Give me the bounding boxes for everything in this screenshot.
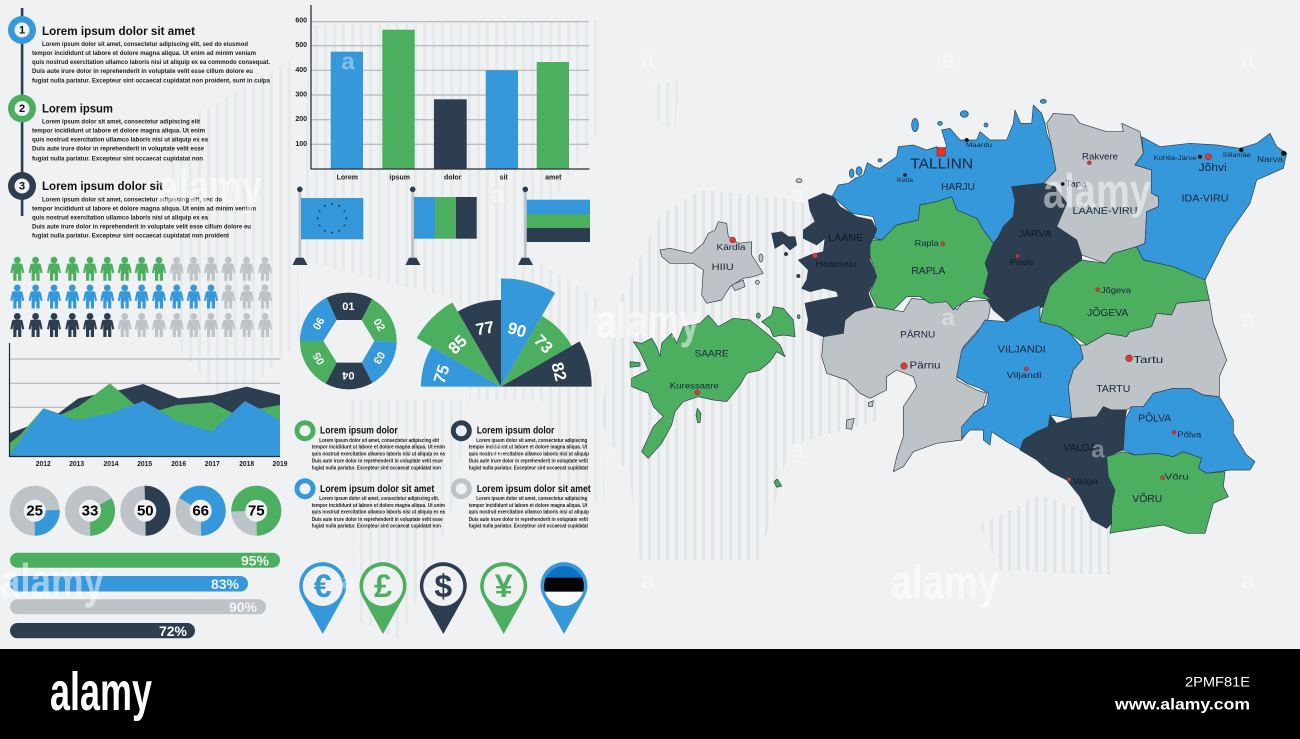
hexagon ring chart xyxy=(300,293,397,389)
area chart: 2017 xyxy=(205,461,220,468)
background striped world map xyxy=(170,20,1110,640)
progress bars: 90% xyxy=(229,599,258,615)
bar chart: Lorem xyxy=(337,174,358,182)
map pin: dollar: $ xyxy=(434,568,452,604)
map labels: Sillamäe xyxy=(1223,152,1251,159)
text block: blue: quis nostrud exercitation ullamco laboris nisi ut aliquip ex ea xyxy=(312,510,445,516)
map pin: yen xyxy=(480,562,527,634)
step 3: 3 xyxy=(19,180,25,192)
progress bars: 83% xyxy=(211,576,240,592)
text block: dark: Lorem ipsum dolor xyxy=(477,425,554,437)
map labels: Tapa xyxy=(1066,180,1087,188)
region: Viljandi xyxy=(957,305,1083,450)
text block: dark: fugiat nulla pariatur. Excepteur sint occaecat cupidatat xyxy=(469,465,588,471)
text block: gray: Duis aute irure dolor in reprehenderit in voluptate velit xyxy=(469,517,588,523)
watermarks: alamy xyxy=(891,556,999,610)
step 3 xyxy=(8,172,256,240)
text block: gray xyxy=(453,481,591,529)
watermarks: a xyxy=(941,46,955,74)
donut charts: 25 xyxy=(26,502,43,520)
watermarks: a xyxy=(1241,568,1255,594)
area chart: 2012 xyxy=(36,461,51,468)
watermarks xyxy=(0,46,1255,610)
map labels: Narva xyxy=(1257,154,1283,164)
map labels: Maardu xyxy=(966,142,992,149)
bar chart: dolor xyxy=(444,174,462,182)
flag: horizontal tricolour xyxy=(518,186,590,265)
map labels: VALGA xyxy=(1064,443,1097,454)
people pictogram xyxy=(10,257,272,337)
bar chart xyxy=(295,5,590,182)
text block: green: Duis aute irure dolor in reprehenderit in voluptate velit esse xyxy=(312,459,443,465)
map labels: Valga xyxy=(1073,477,1098,486)
map labels: Pärnu xyxy=(910,360,940,372)
watermarks: a xyxy=(791,436,805,464)
text block: gray: tempor incididunt ut labore et dolore magna aliqua. Ut xyxy=(469,503,588,509)
watermarks: a xyxy=(941,304,955,332)
region: Põlva xyxy=(1123,388,1255,473)
map city markers xyxy=(695,138,1286,481)
map pin: dollar xyxy=(420,562,467,634)
map labels: Põlva xyxy=(1177,430,1202,440)
bar chart: amet xyxy=(545,174,562,182)
map labels: Kärdla xyxy=(716,243,746,252)
map pin: Estonia flag xyxy=(540,562,588,634)
map pin: pound xyxy=(360,562,406,634)
text block: blue: Lorem ipsum dolor sit amet xyxy=(320,483,435,495)
watermarks: a xyxy=(641,46,655,74)
map pin: pound: £ xyxy=(374,568,392,604)
text block: blue: Lorem ipsum dolor sit amet, consectetur adipiscing elit, xyxy=(319,496,440,502)
region: Võru xyxy=(1107,452,1228,533)
region: Hiiu xyxy=(660,222,763,303)
region: Lääne-Viru xyxy=(1043,113,1158,263)
footer logo: alamy xyxy=(50,662,152,722)
watermarks: alamy xyxy=(0,556,104,608)
map labels: TARTU xyxy=(1096,384,1130,395)
text block: gray: quis nostrud exercitation ullamco laboris nisi ut aliquip xyxy=(469,510,589,516)
step 1: fugiat nulla pariatur. Excepteur sint occaecat cupidatat non proident, sunt in culpa xyxy=(32,78,270,84)
area chart: 2014 xyxy=(104,461,119,468)
map labels: LÄÄNE-VIRU xyxy=(1072,205,1138,217)
watermarks: a xyxy=(1241,46,1255,74)
fan chart: 85 xyxy=(444,331,471,358)
progress bars: 95% xyxy=(241,552,270,568)
watermarks: a xyxy=(1241,306,1255,334)
hexagon ring chart: 06 xyxy=(311,316,328,332)
map labels: Tartu xyxy=(1133,354,1164,366)
donut charts: 50 xyxy=(137,502,154,520)
donut charts xyxy=(17,486,274,536)
text block: dark: tempor incididunt ut labore et dolore magna aliqua. Ut xyxy=(469,445,588,451)
map labels: Rakvere xyxy=(1082,152,1118,162)
watermarks: a xyxy=(1091,436,1105,464)
bar chart: ipsum xyxy=(389,174,410,182)
step 1 xyxy=(8,16,270,84)
region: Valga xyxy=(1020,407,1127,528)
map labels: RAPLA xyxy=(911,266,946,277)
map labels: JÕGEVA xyxy=(1087,306,1129,319)
text block: blue: tempor incididunt ut labore et dolore magna aliqua. Ut enim xyxy=(312,503,446,509)
map labels: HARJU xyxy=(941,182,975,193)
watermarks: a xyxy=(341,48,355,76)
map labels: Kohtla-Järve xyxy=(1154,155,1197,162)
step 2: Lorem ipsum dolor sit amet, consectetur adipiscing elit xyxy=(42,118,201,126)
map labels: Haapsalu xyxy=(816,260,856,268)
fan chart: 77 xyxy=(474,317,496,339)
region: Pärnu xyxy=(822,295,992,472)
bar chart: 600 xyxy=(295,18,307,25)
map of Estonia xyxy=(630,99,1287,533)
text block: dark: Duis aute irure dolor in reprehenderit in voluptate velit xyxy=(469,459,588,465)
watermarks: a xyxy=(341,568,355,594)
text block: gray: Lorem ipsum dolor sit amet, consectetur adipiscing xyxy=(476,496,587,502)
watermarks: a xyxy=(491,436,505,464)
step 1: Lorem ipsum dolor sit amet xyxy=(42,24,195,38)
hexagon ring chart: 05 xyxy=(311,350,328,367)
region: Ida-Viru xyxy=(1135,133,1287,280)
map labels: VILJANDI xyxy=(998,344,1046,356)
map labels: LÄÄNE xyxy=(828,232,864,244)
fan chart: 75 xyxy=(430,362,454,386)
text block: green: fugiat nulla pariatur. Excepteur sint occaecat cupidatat non xyxy=(312,465,441,471)
watermarks: a xyxy=(641,568,655,594)
footer image id: 2PMF81E xyxy=(1185,674,1250,690)
bar chart: 200 xyxy=(295,116,307,123)
area chart: 2019 xyxy=(272,461,288,468)
step 1: Duis aute irure dolor in reprehenderit in voluptate velit esse cillum dolore eu xyxy=(32,68,253,75)
map labels: Keila xyxy=(897,177,913,184)
watermarks: alamy xyxy=(158,162,262,214)
map labels: TALLINN xyxy=(910,156,973,172)
map labels: PÄRNU xyxy=(900,330,935,340)
map labels: IDA-VIRU xyxy=(1182,194,1228,204)
flag: vertical tricolour xyxy=(406,186,477,265)
text block: green: quis nostrud exercitation ullamco laboris nisi ut aliquip ex ea xyxy=(312,452,445,458)
area chart: 2015 xyxy=(137,461,152,468)
step 2: fugiat nulla pariatur. Excepteur sint occaecat cupidatat non xyxy=(32,156,203,162)
step 3: Lorem ipsum dolor sit xyxy=(42,179,163,193)
region: Jõgeva xyxy=(1040,247,1209,345)
fan chart: 82 xyxy=(547,360,571,383)
map pin: euro: € xyxy=(314,568,332,604)
watermarks: alamy xyxy=(1043,166,1151,218)
map labels: Võru xyxy=(1165,472,1189,482)
text block: green: Lorem ipsum dolor xyxy=(320,425,398,437)
text block: dark: Lorem ipsum dolor sit amet, consectetur adipiscing xyxy=(476,438,587,444)
progress bars: 72% xyxy=(159,623,188,639)
region: Rapla xyxy=(868,197,993,310)
watermarks: a xyxy=(791,182,805,208)
map labels: Viljandi xyxy=(1006,371,1042,380)
step 1: tempor incididunt ut labore et dolore magna aliqua. Ut enim ad minim veniam xyxy=(32,50,256,57)
map labels: Jõgeva xyxy=(1101,285,1131,295)
donut charts: 33 xyxy=(82,502,98,520)
text block: dark: quis nostrud exercitation ullamco laboris nisi ut aliquip xyxy=(469,452,589,458)
map labels: Kuressaare xyxy=(670,382,719,390)
area chart: 2018 xyxy=(239,461,254,468)
map labels xyxy=(670,142,1283,505)
map pin: euro xyxy=(299,562,346,634)
text block: blue xyxy=(297,481,446,529)
hexagon ring chart: 02 xyxy=(370,317,387,333)
donut charts: 75 xyxy=(248,502,265,520)
text block: gray: fugiat nulla pariatur. Excepteur sint occaecat cupidatat xyxy=(469,523,588,529)
footer url: www.alamy.com xyxy=(1114,696,1250,714)
bar chart: sit xyxy=(500,174,508,182)
region: Järva xyxy=(983,183,1082,322)
donut charts: 66 xyxy=(192,502,209,520)
map labels: PÕLVA xyxy=(1138,412,1172,424)
step 1: Lorem ipsum dolor sit amet, consectetur adipiscing elit, sed do eiusmod xyxy=(42,41,248,48)
hexagon ring chart: 03 xyxy=(370,349,387,366)
footer band xyxy=(0,649,1300,739)
map labels: Rapla xyxy=(915,238,939,248)
step 2: Lorem ipsum xyxy=(42,102,113,116)
watermarks: a xyxy=(491,182,505,208)
step 2 xyxy=(8,94,208,162)
step 2: 2 xyxy=(19,103,25,115)
region: Lääne xyxy=(772,193,877,337)
map labels: HIIU xyxy=(712,262,734,273)
flag: EU xyxy=(292,186,363,265)
hexagon ring chart: 01 xyxy=(342,301,354,313)
region: Saare xyxy=(630,307,800,487)
text block: green: tempor incididunt ut labore et dolore magna aliqua. Ut enim xyxy=(312,445,446,451)
step 3: fugiat nulla pariatur. Excepteur sint occaecat cupidatat non proident xyxy=(32,232,230,240)
step 1: 1 xyxy=(19,24,25,36)
map labels: JÄRVA xyxy=(1018,228,1052,240)
step 1: quis nostrud exercitation ullamco laboris nisi ut aliquip ex ea commodo consequat. xyxy=(32,59,270,66)
step 2: quis nostrud exercitation ullamco laboris nisi ut aliquip ex ea xyxy=(32,136,208,144)
area chart xyxy=(9,343,288,468)
step 3: tempor incididunt ut labore et dolore magna aliqua. Ut enim ad minim veniam xyxy=(32,206,256,212)
map labels: VÕRU xyxy=(1132,492,1162,505)
bar chart: 300 xyxy=(295,92,307,98)
bar chart: 400 xyxy=(295,67,307,74)
step 2: Duis aute irure dolor in reprehenderit in voluptate velit esse xyxy=(32,146,204,152)
timeline line xyxy=(21,8,23,216)
fan chart xyxy=(417,278,592,387)
step 2: tempor incididunt ut labore et dolore magna aliqua. Ut enim xyxy=(32,128,205,134)
region: Tartu xyxy=(1068,300,1227,418)
watermarks: alamy xyxy=(596,296,700,348)
step 3: quis nostrud exercitation ullamco laboris nisi ut aliquip ex ea xyxy=(32,214,208,222)
hexagon ring chart: 04 xyxy=(341,369,354,381)
fan chart: 73 xyxy=(530,331,557,357)
text block: dark xyxy=(453,423,589,471)
text block: gray: Lorem ipsum dolor sit amet xyxy=(477,483,591,495)
map pin: yen: ¥ xyxy=(495,568,513,604)
bar chart: 500 xyxy=(295,42,307,49)
map labels: Paide xyxy=(1010,258,1034,267)
area chart: 2013 xyxy=(69,461,84,468)
text block: green xyxy=(297,423,446,471)
progress bars xyxy=(10,552,280,639)
text block: blue: fugiat nulla pariatur. Excepteur sint occaecat cupidatat non xyxy=(312,523,441,529)
map labels: Jõhvi xyxy=(1199,162,1227,174)
map labels: SAARE xyxy=(695,348,729,360)
step 3: Duis aute irure dolor in reprehenderit in voluptate velit esse cillum dolore eu xyxy=(32,224,251,230)
bar chart: 100 xyxy=(295,141,307,148)
text block: blue: Duis aute irure dolor in reprehenderit in voluptate velit esse xyxy=(312,517,443,523)
step 3: Lorem ipsum dolor sit amet, consectetur adipiscing elit, sed do xyxy=(42,196,222,204)
region: Harju xyxy=(796,99,1056,243)
text block: green: Lorem ipsum dolor sit amet, consectetur adipiscing elit xyxy=(319,438,439,444)
fan chart: 90 xyxy=(506,318,528,342)
area chart: 2016 xyxy=(171,461,186,468)
